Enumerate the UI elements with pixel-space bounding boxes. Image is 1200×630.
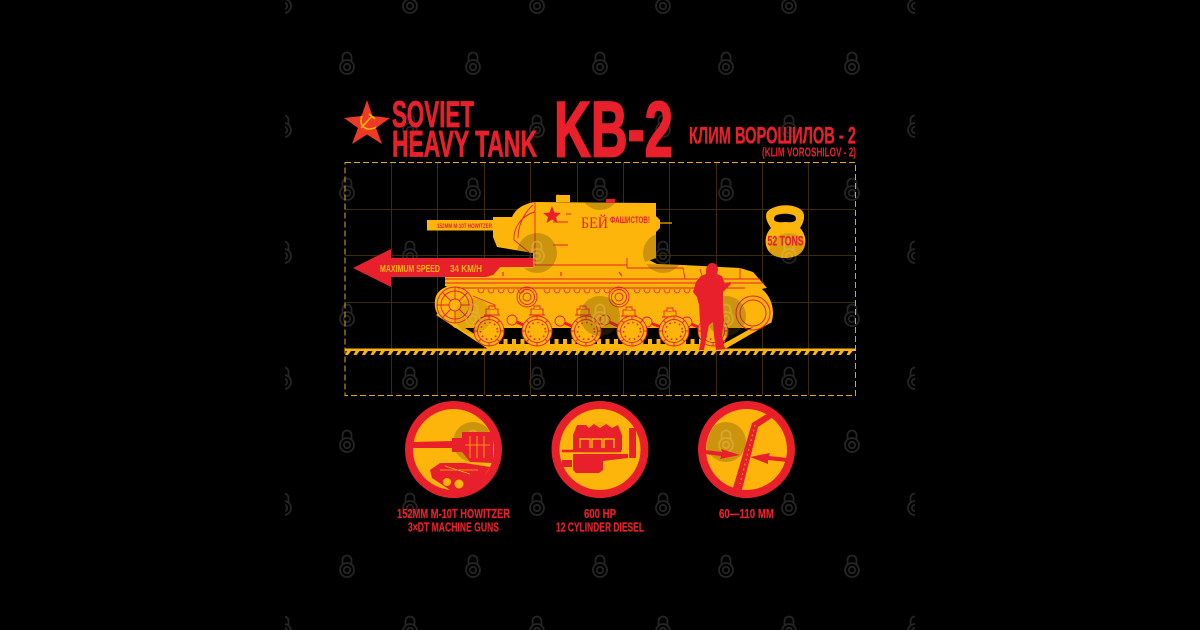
watermark: halos on yellow (454, 202, 806, 462)
engine badge artwork (562, 424, 636, 473)
icon: engine badge (556, 405, 644, 494)
label: armament: 152MM M-10T HOWITZER (397, 506, 510, 521)
kettlebell label: 52 TONS (768, 232, 804, 248)
label: armor: 60—110 MM (719, 506, 774, 521)
turret: БЕЙ (581, 213, 608, 232)
return rollers (517, 287, 629, 307)
label: engine (556, 506, 644, 534)
title: soviet: SOVIET (392, 93, 474, 135)
label: armament (397, 506, 510, 534)
label: engine: 12 CYLINDER DIESEL (556, 520, 644, 534)
watermark: lock grid (277, 0, 922, 630)
icon: soviet star with hammer and sickle (344, 100, 390, 144)
panel: blueprint grid (345, 162, 856, 396)
arrow: maximum speed (353, 249, 533, 287)
title: KB-2: KB-2 (554, 84, 673, 174)
ground line (345, 348, 856, 355)
gun barrel (427, 220, 493, 230)
label: engine: 600 HP (584, 506, 616, 521)
howitzer badge artwork (413, 432, 493, 491)
icon: howitzer badge (409, 405, 498, 494)
subtitle: russian name: КЛИМ ВОРОШИЛОВ - 2 (689, 122, 856, 150)
subtitle: latin name: (KLIM VOROSHILOV - 2) (762, 144, 856, 160)
icon: kettlebell weight (766, 205, 805, 258)
turret: ФАШИСТОВ! (610, 215, 650, 226)
gun barrel: 152MM M-10T HOWITZER (437, 224, 493, 230)
label: armament: 3×DT MACHINE GUNS (408, 520, 499, 534)
turret (493, 195, 672, 267)
armor badge artwork (705, 412, 788, 490)
arrow: maximum speed: 34 KM/H (450, 263, 482, 275)
track teeth (495, 339, 725, 345)
title: heavy tank: HEAVY TANK (392, 122, 537, 164)
drive sprocket (437, 287, 495, 323)
tank illustration (427, 195, 773, 349)
icon: armor badge (702, 405, 791, 494)
soldier silhouette (693, 263, 731, 350)
hull (445, 258, 767, 292)
idler wheel (736, 296, 770, 330)
lower hull and track (435, 285, 773, 349)
road wheels (474, 306, 728, 346)
arrow: maximum speed: MAXIMUM SPEED (380, 263, 440, 275)
